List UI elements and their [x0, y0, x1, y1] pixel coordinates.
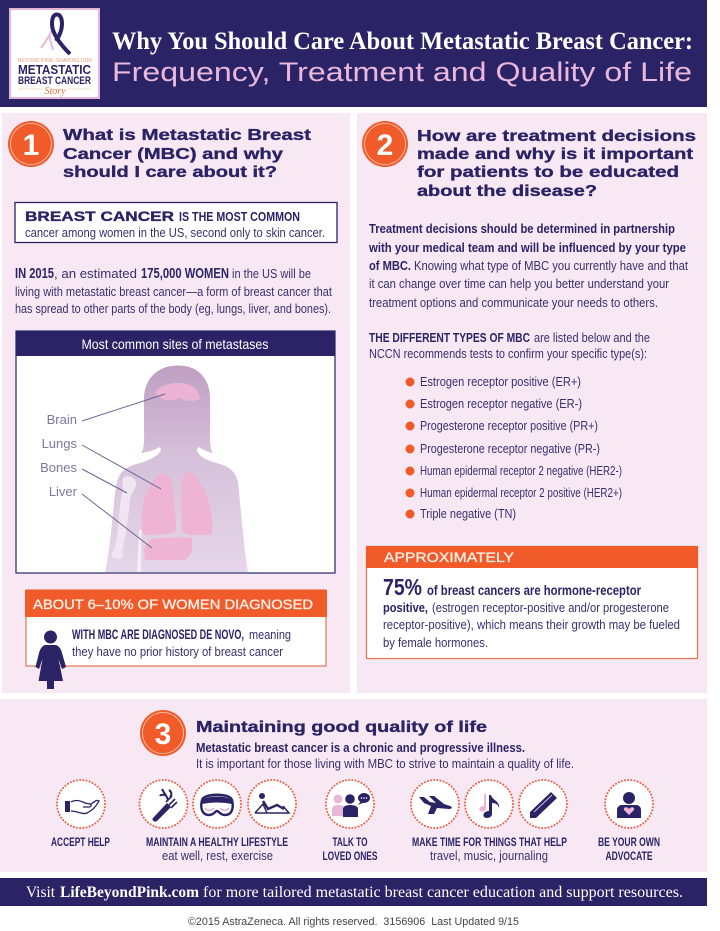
icon: helping hand: [57, 780, 105, 828]
treatment paragraph: of MBC.: [369, 258, 411, 273]
icon: woman: [36, 630, 66, 689]
MBC type list: Triple negative (TN): [420, 506, 516, 521]
heading 2: about the disease?: [417, 183, 597, 200]
treatment paragraph: treatment options and communicate your needs to others.: [369, 295, 658, 310]
de novo callout: meaning: [249, 627, 291, 642]
breast cancer fact box: BREAST CANCER: [25, 208, 174, 224]
breast cancer fact box: IS THE MOST COMMON: [179, 209, 300, 224]
icon captions: [51, 835, 660, 863]
copyright: ©2015 AstraZeneca. All rights reserved. 3156906 Last Updated 9/15: [188, 916, 519, 928]
brain: [155, 383, 200, 401]
number badge 1: 1: [23, 129, 39, 162]
panel 3: quality of life: [0, 699, 707, 872]
organ labels: Brain: [47, 412, 77, 427]
types intro: [369, 330, 650, 361]
header banner: [0, 0, 707, 107]
de novo callout: ABOUT 6–10% OF WOMEN DIAGNOSED: [33, 596, 313, 612]
de novo callout: WITH MBC ARE DIAGNOSED DE NOVO,: [72, 626, 244, 642]
bone: [112, 476, 136, 559]
icon captions: eat well, rest, exercise: [162, 848, 273, 863]
icon captions: MAKE TIME FOR THINGS THAT HELP: [412, 835, 567, 849]
treatment paragraph: Treatment decisions should be determined in partnership: [369, 221, 675, 236]
icon: music note: [465, 780, 513, 828]
heading 2: How are treatment decisions: [417, 128, 696, 145]
heading 1: should I care about it?: [63, 164, 277, 181]
heading 1: Cancer (MBC) and why: [63, 146, 283, 163]
body silhouette: [105, 366, 248, 572]
2015 statistic text: in the US will be: [232, 266, 311, 281]
quality of life intro: It is important for those living with MBC to strive to maintain a quality of life.: [196, 756, 574, 771]
treatment paragraph: it can change over time can help you better understand your: [369, 276, 670, 291]
MBC type list: Progesterone receptor positive (PR+): [420, 418, 598, 433]
panel 1: what is MBC: [2, 113, 350, 693]
heading 1: What is Metastatic Breast: [63, 127, 312, 144]
liver: [144, 537, 192, 560]
icon: airplane: [411, 780, 459, 828]
breast cancer fact box: [15, 202, 337, 242]
icon captions: MAINTAIN A HEALTHY LIFESTYLE: [146, 835, 288, 849]
icon: advocate with heart: [605, 780, 653, 828]
types intro: THE DIFFERENT TYPES OF MBC: [369, 330, 530, 345]
icon captions: LOVED ONES: [322, 849, 378, 863]
2015 statistic text: , an estimated: [54, 266, 137, 281]
logo: BEYOND PINK: SHARING OUR: [18, 58, 92, 64]
2015 statistic text: has spread to other parts of the body (eg, lungs, liver, and bones).: [15, 301, 331, 316]
75 percent callout: APPROXIMATELY: [384, 549, 515, 565]
MBC type list: Human epidermal receptor 2 positive (HER2+): [420, 485, 622, 500]
number badge 1: [8, 121, 54, 167]
heading 2: made and why is it important: [417, 146, 694, 163]
organ labels: Liver: [49, 484, 78, 499]
icon captions: TALK TO: [332, 835, 368, 849]
footer banner: for more tailored metastatic breast cancer education and support resources.: [203, 884, 683, 901]
quality of life intro: [196, 740, 574, 771]
panel 2: treatment decisions: [357, 113, 707, 693]
75 percent callout: [366, 546, 698, 658]
organ labels: Bones: [40, 460, 77, 475]
2015 statistic text: IN 2015: [15, 265, 54, 282]
footer banner: Visit: [26, 884, 56, 901]
MBC type list: [406, 374, 622, 521]
logo: METASTATIC: [18, 63, 91, 77]
organ labels: Lungs: [42, 436, 77, 451]
icon captions: ADVOCATE: [606, 849, 652, 863]
heading 2: for patients to be educated: [417, 164, 679, 181]
types intro: NCCN recommends tests to confirm your specific type(s):: [369, 346, 647, 361]
MBC type list: Estrogen receptor positive (ER+): [420, 374, 581, 389]
MBC type list: Estrogen receptor negative (ER-): [420, 396, 582, 411]
icon: exercise: [248, 780, 296, 828]
metastases diagram: [16, 331, 335, 573]
number badge 2: 2: [377, 129, 393, 162]
types intro: are listed below and the: [534, 330, 650, 345]
organ labels: [40, 412, 78, 499]
75 percent callout: positive,: [383, 600, 428, 615]
logo: [10, 9, 99, 98]
MBC type list: Progesterone receptor negative (PR-): [420, 441, 600, 456]
icon: fork with herbs: [140, 780, 188, 828]
75 percent callout: (estrogen receptor-positive and/or progesterone: [432, 600, 669, 615]
pointer lines: [82, 394, 165, 548]
number badge 3: [140, 710, 186, 756]
MBC type list: Human epidermal receptor 2 negative (HER2-): [420, 463, 622, 478]
de novo callout: [25, 590, 327, 689]
icon: sleep mask: [193, 780, 241, 828]
icon captions: ACCEPT HELP: [51, 835, 110, 849]
logo: BREAST CANCER: [18, 75, 91, 87]
title: Why You Should Care About Metastatic Breast Cancer:: [112, 28, 693, 55]
logo: Story: [44, 86, 66, 97]
icon: talking people: [326, 780, 374, 828]
icon: pencil: [519, 780, 567, 828]
heading 2: [417, 128, 696, 200]
heading 3: Maintaining good quality of life: [196, 719, 487, 736]
75 percent callout: receptor-positive), which means their growth may be fueled: [383, 617, 680, 632]
footer banner: LifeBeyondPink.com: [60, 884, 199, 901]
number badge 2: [362, 121, 408, 167]
2015 statistic text: 175,000 WOMEN: [141, 265, 229, 282]
number badge 3: 3: [155, 718, 171, 751]
icon captions: travel, music, journaling: [430, 848, 548, 863]
2015 statistic text: living with metastatic breast cancer—a form of breast cancer that: [15, 284, 332, 299]
breast cancer fact box: cancer among women in the US, second only to skin cancer.: [25, 225, 325, 240]
75 percent callout: by female hormones.: [383, 635, 488, 650]
lungs: [142, 473, 176, 535]
2015 statistic text: [15, 265, 332, 316]
quality of life intro: Metastatic breast cancer is a chronic and progressive illness.: [196, 740, 525, 755]
75 percent callout: 75%: [383, 574, 422, 600]
treatment paragraph: [368, 221, 688, 310]
75 percent callout: of breast cancers are hormone-receptor: [427, 583, 642, 598]
footer banner: [0, 878, 707, 906]
heading 1: [63, 127, 312, 181]
metastases diagram: Most common sites of metastases: [82, 336, 268, 352]
subtitle: Frequency, Treatment and Quality of Life: [112, 57, 692, 87]
de novo callout: they have no prior history of breast cancer: [72, 644, 284, 659]
icon captions: BE YOUR OWN: [598, 835, 660, 849]
